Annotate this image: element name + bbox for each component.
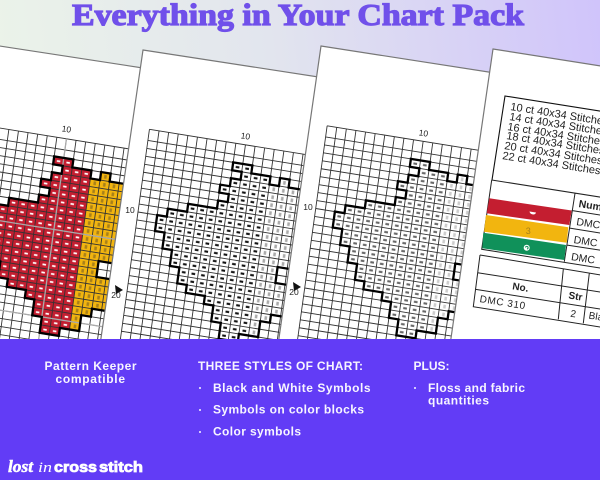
stitch sizes box <box>492 96 600 180</box>
row label 20 with arrow <box>111 285 123 300</box>
panel: black and white symbols page <box>100 49 316 339</box>
key labels: DMC <box>570 251 596 267</box>
floss table: Str <box>568 291 583 304</box>
column label: 10 <box>240 130 251 142</box>
row label 20 with arrow <box>289 282 301 297</box>
logo: in <box>38 460 52 476</box>
row label 10: 10 <box>125 205 135 215</box>
color key table <box>482 180 600 272</box>
text: pattern keeper <box>44 359 137 386</box>
text: plus: quantities <box>428 394 489 408</box>
chart: heart on color blocks <box>0 128 128 339</box>
floss table: DMC 310 <box>479 294 526 312</box>
panel: floss key page <box>450 49 600 345</box>
text: three styles of chart <box>198 359 371 438</box>
yellow symbol: 3 <box>526 226 531 236</box>
key labels: DMC <box>573 234 599 250</box>
row label 10: 10 <box>303 202 313 212</box>
text: plus: Floss and fabric <box>428 381 525 395</box>
text: plus: PLUS: <box>414 359 450 373</box>
column label: 10 <box>61 123 72 135</box>
text: three styles of chart: THREE STYLES OF CHART: <box>198 359 363 373</box>
panel: color symbols page <box>278 45 490 339</box>
green row <box>482 233 566 260</box>
stitch sizes box: 22 ct 40x34 Stitches <box>502 150 600 178</box>
icon: bowl symbol <box>530 212 536 214</box>
panel: color block chart page <box>0 46 140 339</box>
panel: purple footer <box>0 339 600 480</box>
red row <box>487 198 572 225</box>
floss table <box>473 255 600 331</box>
logo: stitch <box>99 459 143 476</box>
logo <box>8 457 143 476</box>
text: plus <box>414 359 525 408</box>
column label: 10 <box>418 127 429 139</box>
text: pattern keeper: compatible <box>56 372 125 386</box>
logo: cross <box>54 459 97 476</box>
floss table: 2 <box>569 309 577 320</box>
chart: color symbols heart <box>297 125 478 339</box>
floss table: No. <box>512 281 529 295</box>
text: three styles of chart: Color symbols <box>213 424 301 438</box>
text: three styles of chart: Symbols on color blocks <box>213 402 364 416</box>
row label 20 with arrow: 20 <box>289 287 299 297</box>
key labels <box>570 198 600 267</box>
text: pattern keeper: Pattern Keeper <box>44 359 137 373</box>
chart: black and white heart <box>120 128 305 339</box>
yellow row <box>484 215 568 243</box>
row label 20 with arrow: 20 <box>111 290 121 300</box>
text: three styles of chart: Black and White Symbols <box>213 381 371 395</box>
logo: lost <box>8 457 34 476</box>
icon: swirl symbol <box>524 245 530 251</box>
